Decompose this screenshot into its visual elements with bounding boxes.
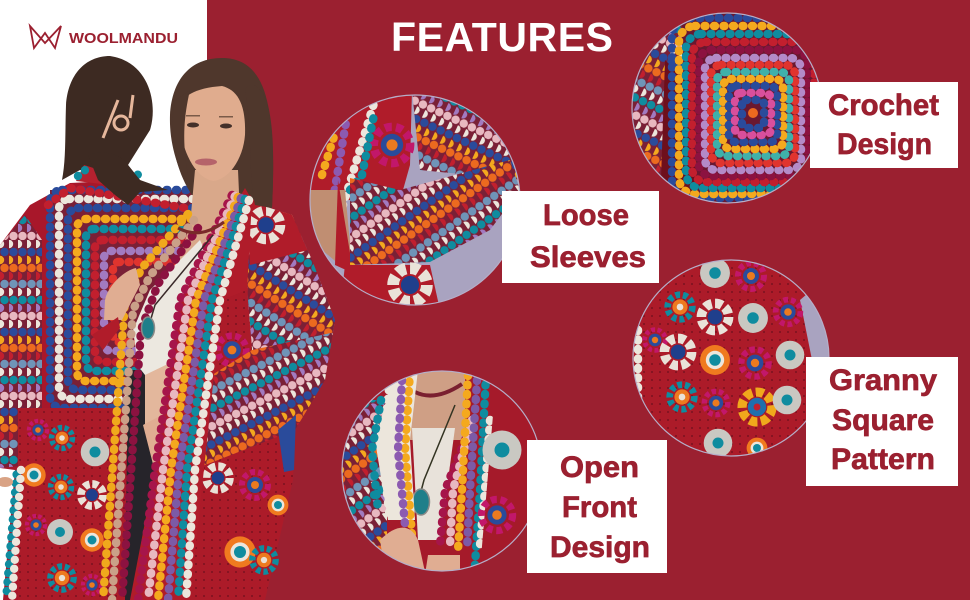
model wearing the cardigan bbox=[0, 56, 350, 600]
feature: loose sleeves bbox=[310, 90, 659, 310]
front body granny squares bbox=[206, 336, 288, 572]
sleeve: upper arm and forearm bbox=[161, 202, 335, 466]
circle photo: sleeve detail bbox=[310, 90, 520, 310]
collar bbox=[76, 165, 140, 188]
logo: Woolmandu: WOOLMANDU bbox=[69, 30, 178, 47]
label text: Granny bbox=[829, 364, 937, 397]
left hand bbox=[0, 477, 13, 487]
feature: open front design bbox=[342, 370, 667, 575]
trousers bbox=[125, 370, 172, 600]
feature: loose sleeves: Sleeves bbox=[530, 241, 646, 274]
cuff near hand bbox=[92, 317, 120, 350]
back-view woman's hair bbox=[62, 56, 153, 205]
circle photo: granny squares bbox=[633, 258, 835, 458]
feature: crochet design bbox=[632, 13, 958, 210]
feature: crochet design: Design bbox=[837, 128, 932, 161]
logo: Woolmandu bbox=[30, 26, 178, 48]
back coat base bbox=[0, 180, 190, 600]
label text: Open bbox=[560, 451, 639, 484]
white crop top bbox=[133, 240, 210, 375]
back yoke concentric rows bbox=[50, 190, 240, 408]
hair clip bbox=[103, 95, 133, 138]
circle photo: concentric crochet square bbox=[632, 14, 818, 202]
left lapel bbox=[103, 214, 198, 600]
eyes and lips bbox=[186, 115, 233, 166]
white left panel bbox=[0, 0, 207, 600]
front body red panel bbox=[170, 195, 300, 600]
front woman's hair back bbox=[170, 58, 273, 208]
label box bbox=[810, 82, 958, 168]
ponytail bbox=[88, 152, 168, 205]
label text: Loose bbox=[543, 199, 629, 232]
circle photo: open front bbox=[342, 370, 545, 575]
left sleeve stripes bbox=[0, 215, 42, 468]
feature: open front design: Front bbox=[562, 491, 637, 524]
back coat left edge stripes bbox=[6, 470, 17, 600]
title: FEATURES bbox=[391, 14, 613, 60]
right lapel bbox=[130, 188, 252, 600]
label text: Crochet bbox=[828, 89, 939, 122]
feature: granny square pattern: Pattern bbox=[831, 443, 935, 476]
feature: granny square pattern: Square bbox=[832, 404, 934, 437]
hand holding lapel bbox=[104, 268, 140, 320]
sleeve lower patch bbox=[278, 415, 296, 472]
face bbox=[178, 86, 245, 181]
neck and chest bbox=[178, 170, 240, 262]
feature: granny square pattern bbox=[633, 258, 958, 486]
label box bbox=[502, 191, 659, 283]
label box bbox=[527, 440, 667, 573]
midriff bbox=[145, 360, 175, 430]
feature: open front design: Design bbox=[550, 531, 650, 564]
lower hand bbox=[143, 416, 166, 472]
label box bbox=[806, 357, 958, 486]
necklace and pendant bbox=[142, 222, 224, 339]
lower back granny squares bbox=[18, 408, 130, 600]
back yoke top band bbox=[48, 188, 185, 208]
front hair side strands bbox=[172, 85, 273, 208]
